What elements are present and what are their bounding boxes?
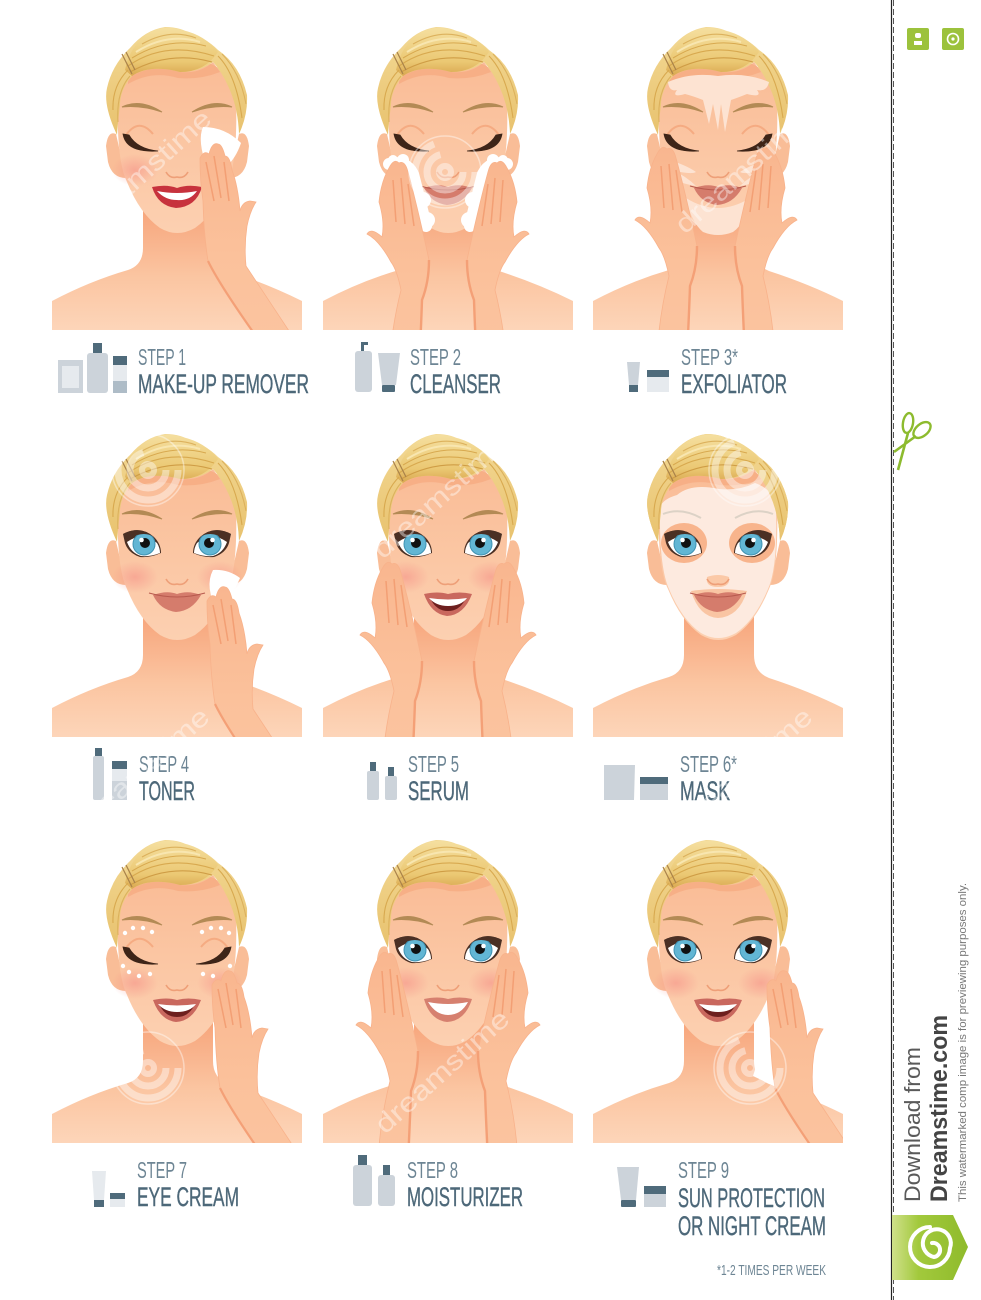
label: step 8: MOISTURIZER — [407, 1182, 523, 1212]
watermark text and spirals: dreamstime — [69, 701, 215, 837]
logo: green dreamstime badge — [892, 1215, 968, 1280]
label: step 2: CLEANSER — [410, 369, 501, 399]
label: step 2 — [410, 344, 501, 399]
label: step 6: MASK — [680, 776, 730, 806]
label: step 7: STEP 7 — [137, 1157, 187, 1183]
label: step 1: STEP 1 — [138, 344, 186, 370]
panel: step 4 toner — [52, 434, 306, 806]
icon: cleanser products — [355, 342, 400, 392]
label: step 2: STEP 2 — [410, 344, 461, 370]
portrait: removing make-up — [52, 27, 302, 346]
icon: serum bottles — [367, 762, 397, 800]
download text: This watermarked comp image is for previewing purposes only. — [957, 883, 969, 1202]
cut line — [892, 0, 894, 1300]
icon: make-up remover products — [58, 343, 127, 393]
watermark text and spirals: dreamstime — [669, 103, 815, 239]
panel: step 8 moisturizer — [323, 840, 573, 1212]
label: step 4: TONER — [139, 776, 195, 806]
label: step 9 — [678, 1157, 826, 1241]
label: step 4 — [139, 751, 195, 806]
portrait: applying sun protection — [593, 840, 843, 1143]
label: step 4: STEP 4 — [139, 751, 189, 777]
label: step 9: OR NIGHT CREAM — [678, 1211, 826, 1241]
label: step 5: SERUM — [408, 776, 469, 806]
icon: mask products — [604, 765, 668, 800]
watermark text and spirals: dreamstime — [672, 701, 818, 837]
label: step 9: SUN PROTECTION — [678, 1183, 825, 1213]
label: step 7: EYE CREAM — [137, 1182, 239, 1212]
panel: step 9 sun protection or night cream — [593, 840, 866, 1241]
label: step 1 — [138, 344, 309, 399]
label: step 8: STEP 8 — [407, 1157, 458, 1183]
label: step 6 — [680, 751, 737, 806]
icon: exfoliator products — [627, 362, 669, 392]
label: step 5 — [408, 751, 469, 806]
label: step 8 — [407, 1157, 523, 1212]
panel: step 5 serum — [323, 434, 573, 806]
icon: moisturizer bottles — [353, 1155, 395, 1206]
portrait: applying serum — [323, 434, 573, 737]
label: step 6: STEP 6* — [680, 751, 737, 777]
download text: Dreamstime.com — [926, 1015, 953, 1202]
icon: toner products — [93, 748, 127, 800]
label: step 5: STEP 5 — [408, 751, 459, 777]
label: step 1: MAKE-UP REMOVER — [138, 369, 309, 399]
portrait: applying toner — [52, 434, 302, 737]
watermark text and spirals: dreamstime — [367, 428, 513, 564]
portrait: applying eye cream — [52, 840, 302, 1143]
icon: sun protection products — [617, 1167, 666, 1207]
panel: step 7 eye cream — [52, 840, 311, 1212]
watermark text and spirals: dreamstime — [369, 1003, 515, 1139]
label: step 7 — [137, 1157, 239, 1212]
watermark text and spirals: dreamstime — [71, 103, 217, 239]
panel: step 3 exfoliator — [593, 27, 843, 399]
download text: Download from — [900, 1047, 925, 1202]
icon: green badge two — [942, 28, 964, 50]
portrait: applying moisturizer — [323, 840, 573, 1161]
icon: green scissors — [894, 412, 934, 470]
label: step 3: STEP 3* — [681, 344, 738, 370]
icon: eye cream products — [92, 1171, 125, 1207]
panel: step 1 make-up remover — [52, 27, 309, 399]
icon: green badge one — [907, 28, 929, 50]
download text — [900, 883, 969, 1202]
label: step 3 — [681, 344, 787, 399]
portrait: applying exfoliator — [593, 27, 843, 356]
label: step 3: EXFOLIATOR — [681, 369, 787, 399]
footnote: *1-2 TIMES PER WEEK — [717, 1262, 826, 1279]
panel: step 2 cleanser — [323, 27, 573, 399]
portrait: face mask — [593, 434, 843, 737]
watermark text and spirals — [69, 103, 818, 1139]
label: step 9: STEP 9 — [678, 1157, 729, 1183]
portrait: cleansing foam — [323, 27, 573, 330]
panel: step 6 mask — [593, 434, 843, 806]
